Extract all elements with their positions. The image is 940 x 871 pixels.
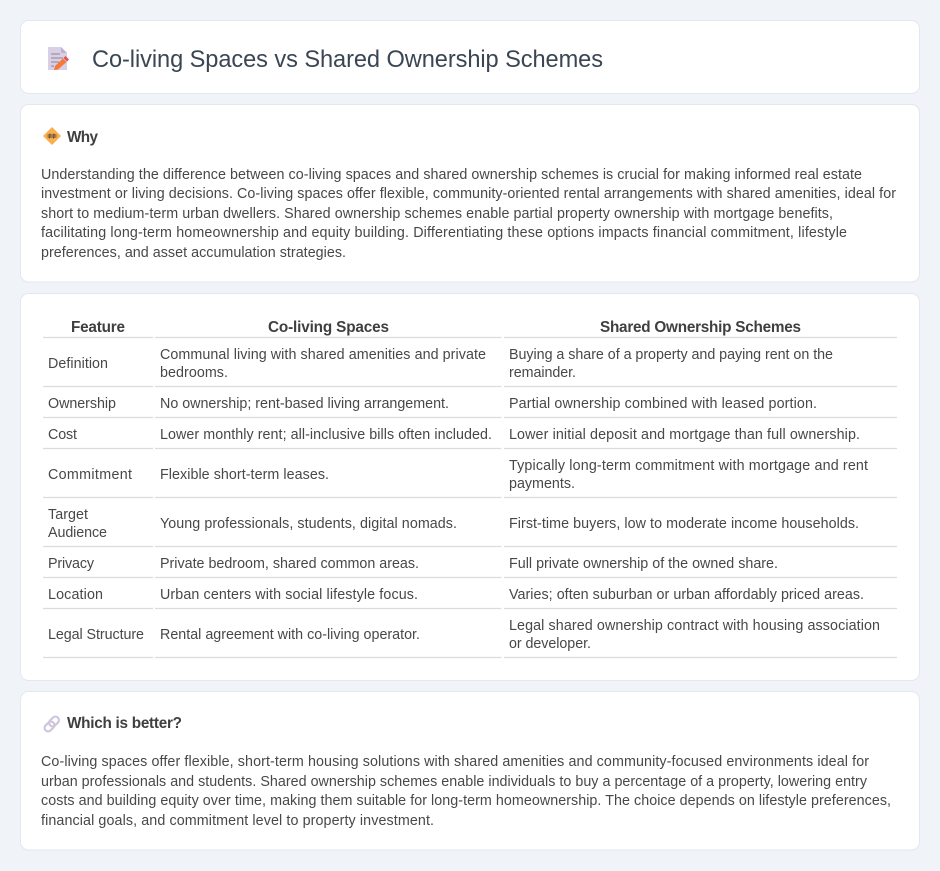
row: ownership: Ownership — [48, 396, 116, 412]
panel: comparison table — [20, 294, 920, 680]
row: target audience: Target — [48, 507, 88, 523]
row: location: Urban centers with social lifestyle focus. — [160, 587, 418, 603]
row: legal structure: Legal shared ownership contract with housing association — [509, 618, 880, 634]
row: definition: Definition — [48, 356, 108, 372]
panel: which is better — [20, 692, 920, 850]
icon: memo with pencil — [48, 47, 69, 70]
row: ownership — [48, 396, 817, 412]
row: ownership: No ownership; rent-based living arrangement. — [160, 396, 449, 412]
row: legal structure: Legal Structure — [48, 627, 144, 643]
text block: why paragraph: preferences, and asset accumulation strategies. — [41, 245, 346, 261]
icon: link — [43, 715, 60, 733]
text block: why paragraph: investment or living decisions. Co-living spaces offer flexible, community-oriented rental arrangements with shared amenities, ideal for — [41, 186, 896, 202]
table header row: Feature — [71, 319, 125, 336]
heading: which is better: Which is better? — [67, 715, 182, 732]
row: cost: Lower initial deposit and mortgage than full ownership. — [509, 427, 860, 443]
row: legal structure: or developer. — [509, 636, 591, 652]
text block: which is better paragraph: urban professionals and students. Shared ownership schemes enable individuals to buy a percentage of a property, lowering entry — [41, 774, 868, 790]
table header row: Co-living Spaces — [268, 319, 389, 336]
row: definition — [48, 347, 833, 381]
text block: why paragraph: facilitating long-term homeownership and equity building. Differentiating these options impacts financial commitment, lifestyle — [41, 225, 847, 241]
text block: which is better paragraph — [41, 754, 891, 829]
row: commitment — [48, 458, 868, 492]
row: location: Varies; often suburban or urban affordably priced areas. — [509, 587, 864, 603]
title: Co-living Spaces vs Shared Ownership Schemes — [92, 47, 603, 73]
text block: why paragraph: Understanding the difference between co-living spaces and shared ownership schemes is crucial for making informed real estate — [41, 167, 862, 183]
row: privacy: Private bedroom, shared common areas. — [160, 556, 419, 572]
text block: which is better paragraph: costs and building equity over time, making them suitable for long-term homeownership. The choice depends on lifestyle preferences, — [41, 793, 891, 809]
row: commitment: Typically long-term commitment with mortgage and rent — [509, 458, 868, 474]
text block: which is better paragraph: financial goals, and commitment level to property investment. — [41, 813, 434, 829]
panel: title header — [20, 20, 920, 94]
row: location: Location — [48, 587, 103, 603]
row: legal structure: Rental agreement with co-living operator. — [160, 627, 420, 643]
table header row — [71, 319, 801, 336]
row: definition: bedrooms. — [160, 365, 228, 381]
row: target audience: Audience — [48, 525, 107, 541]
icon: warning diamond — [44, 128, 60, 144]
row: definition: remainder. — [509, 365, 576, 381]
text block: why paragraph — [41, 167, 896, 261]
row: legal structure — [48, 618, 880, 652]
row: privacy — [48, 556, 778, 572]
row: target audience: First-time buyers, low to moderate income households. — [509, 516, 859, 532]
row: commitment: payments. — [509, 476, 575, 492]
row: location — [48, 587, 864, 603]
row: definition: Communal living with shared amenities and private — [160, 347, 486, 363]
row: cost — [48, 427, 860, 443]
row: target audience — [48, 507, 859, 541]
row: commitment: Commitment — [48, 467, 132, 483]
row: privacy: Privacy — [48, 556, 95, 572]
panel: why — [20, 104, 920, 282]
row: ownership: Partial ownership combined with leased portion. — [509, 396, 817, 412]
row: privacy: Full private ownership of the owned share. — [509, 556, 778, 572]
row: cost: Cost — [48, 427, 77, 443]
row: commitment: Flexible short-term leases. — [160, 467, 329, 483]
row: target audience: Young professionals, students, digital nomads. — [160, 516, 457, 532]
text block: why paragraph: short to medium-term urban dwellers. Shared ownership schemes enable partial property ownership with mortgage benefits, — [41, 206, 833, 222]
heading: why: Why — [67, 129, 98, 146]
text block: which is better paragraph: Co-living spaces offer flexible, short-term housing solutions with shared amenities and community-focused environments ideal for — [41, 754, 869, 770]
row: definition: Buying a share of a property and paying rent on the — [509, 347, 833, 363]
row: cost: Lower monthly rent; all-inclusive bills often included. — [160, 427, 492, 443]
table header row: Shared Ownership Schemes — [600, 319, 801, 336]
